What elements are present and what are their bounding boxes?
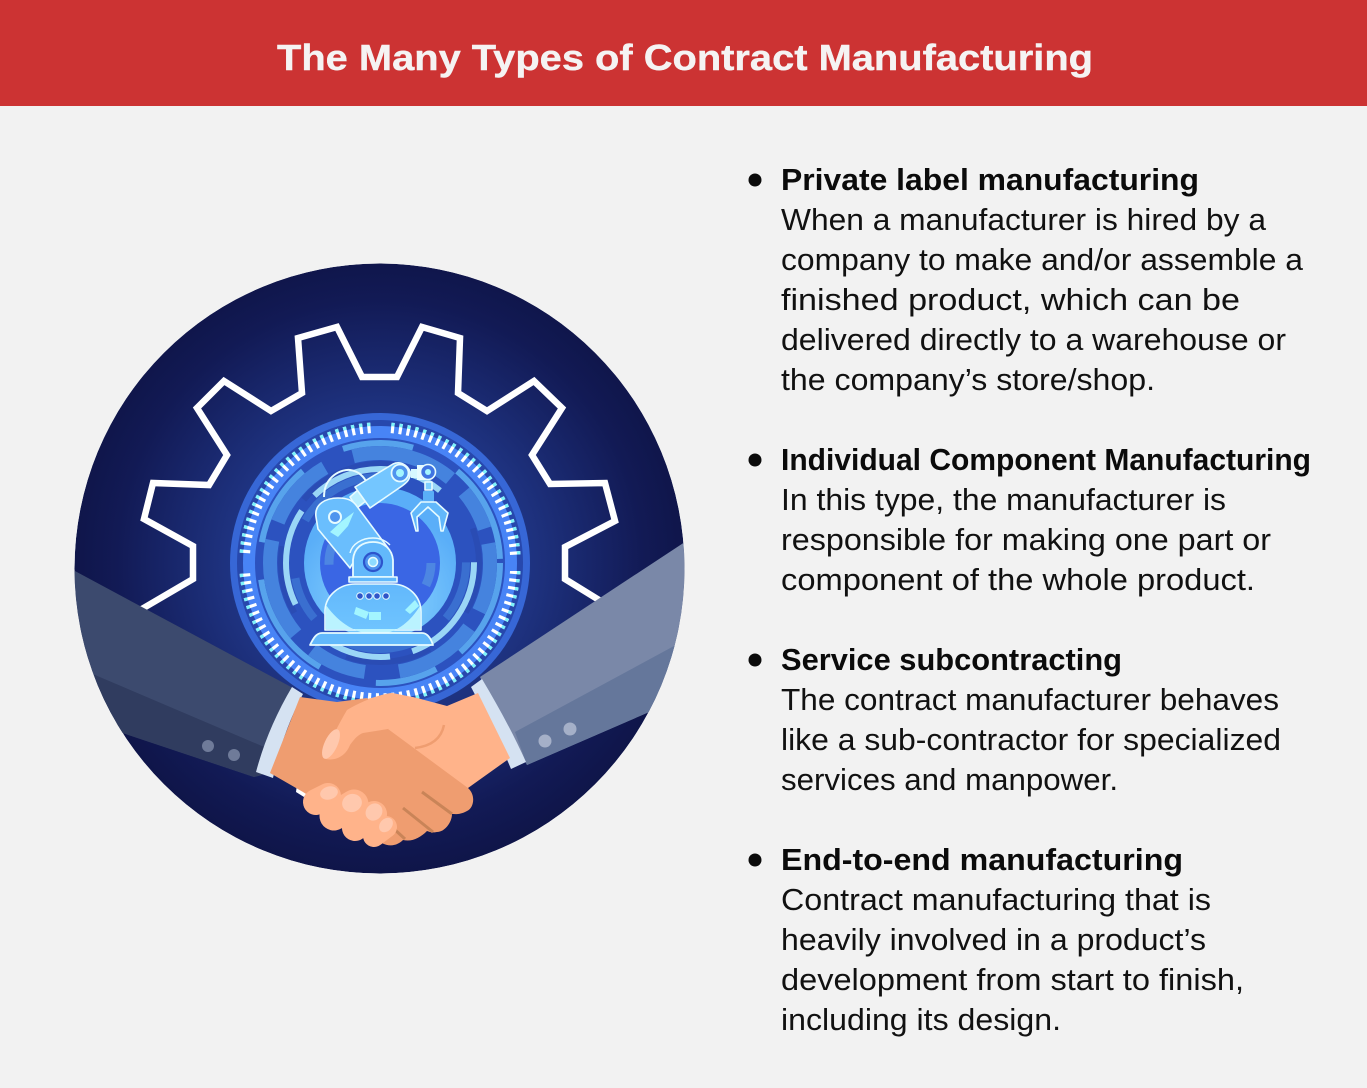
right sleeve	[480, 543, 684, 765]
header banner	[0, 0, 1367, 106]
list item: individual component manufacturing: Individual Component Manufacturing	[781, 442, 1311, 477]
lower arm	[316, 498, 388, 568]
gripper	[425, 482, 432, 490]
bullet	[748, 454, 762, 466]
bullet	[748, 654, 762, 666]
icon: gear outline	[135, 327, 615, 797]
background circle	[74, 264, 684, 874]
list item: service subcontracting	[748, 642, 1281, 797]
list item: private label manufacturing: finished product, which can be	[781, 282, 1240, 317]
list item: individual component manufacturing: component of the whole product.	[781, 562, 1255, 597]
technology dial	[230, 413, 530, 713]
finger highlights	[320, 786, 393, 832]
list item: individual component manufacturing: In this type, the manufacturer is	[781, 482, 1226, 517]
list item: private label manufacturing: delivered directly to a warehouse or	[781, 322, 1286, 357]
list item: private label manufacturing: Private label manufacturing	[781, 162, 1199, 197]
pedestal	[353, 542, 393, 577]
dial segments	[260, 443, 500, 683]
list item: private label manufacturing: the company’s store/shop.	[781, 362, 1155, 397]
dial tick marks	[241, 424, 519, 702]
list item: end-to-end manufacturing: heavily involved in a product’s	[781, 922, 1206, 957]
left hand	[270, 697, 473, 845]
connector	[349, 490, 365, 508]
knuckle creases	[393, 792, 452, 839]
lower sleeve shade	[515, 646, 674, 765]
list item: service subcontracting: services and manpower.	[781, 762, 1118, 797]
list item: end-to-end manufacturing: development from start to finish,	[781, 962, 1244, 997]
icon: robot arm	[310, 463, 448, 645]
sleeve buttons	[202, 740, 214, 752]
sleeve buttons	[538, 734, 552, 748]
inner light ring	[304, 487, 456, 639]
list item: private label manufacturing: When a manufacturer is hired by a	[781, 202, 1267, 237]
list item: private label manufacturing: company to make and/or assemble a	[781, 242, 1304, 277]
cable	[324, 470, 366, 497]
lower sleeve shade	[94, 674, 264, 777]
list item: individual component manufacturing: responsible for making one part or	[781, 522, 1271, 557]
wrist	[411, 469, 417, 478]
list item: individual component manufacturing	[748, 442, 1311, 597]
list item: service subcontracting: The contract manufacturer behaves	[781, 682, 1279, 717]
upper arm	[355, 463, 410, 508]
title: The Many Types of Contract Manufacturing	[277, 37, 1093, 78]
left sleeve	[74, 571, 292, 777]
list item: end-to-end manufacturing: including its design.	[781, 1002, 1061, 1037]
list item: end-to-end manufacturing: Contract manufacturing that is	[781, 882, 1211, 917]
fingers	[316, 796, 386, 836]
thumb highlight	[322, 729, 340, 759]
list item: service subcontracting: Service subcontracting	[781, 642, 1122, 677]
palm crease	[415, 725, 444, 748]
handshake	[270, 693, 510, 845]
bullet	[748, 854, 762, 866]
list item: end-to-end manufacturing	[748, 842, 1244, 1037]
thumb	[323, 693, 417, 759]
list item: end-to-end manufacturing: End-to-end manufacturing	[781, 842, 1183, 877]
list item: service subcontracting: like a sub-contractor for specialized	[781, 722, 1281, 757]
right hand palm	[368, 693, 510, 788]
bullet	[748, 174, 762, 186]
dome body	[325, 584, 421, 630]
cuffs	[256, 679, 526, 778]
base plate	[310, 633, 433, 645]
illustration: handshake and robot in gear	[60, 264, 700, 874]
list item: private label manufacturing	[748, 162, 1304, 397]
